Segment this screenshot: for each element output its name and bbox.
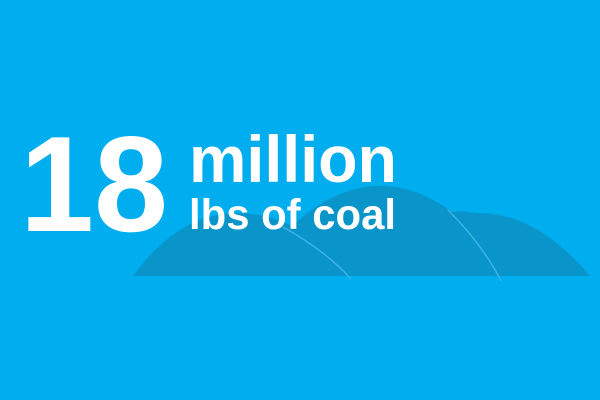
coal pile illustration <box>133 186 590 281</box>
label: lbs of coal: lbs of coal <box>189 191 396 239</box>
big number 18: 18 <box>20 108 168 260</box>
label: million: million <box>189 122 397 196</box>
